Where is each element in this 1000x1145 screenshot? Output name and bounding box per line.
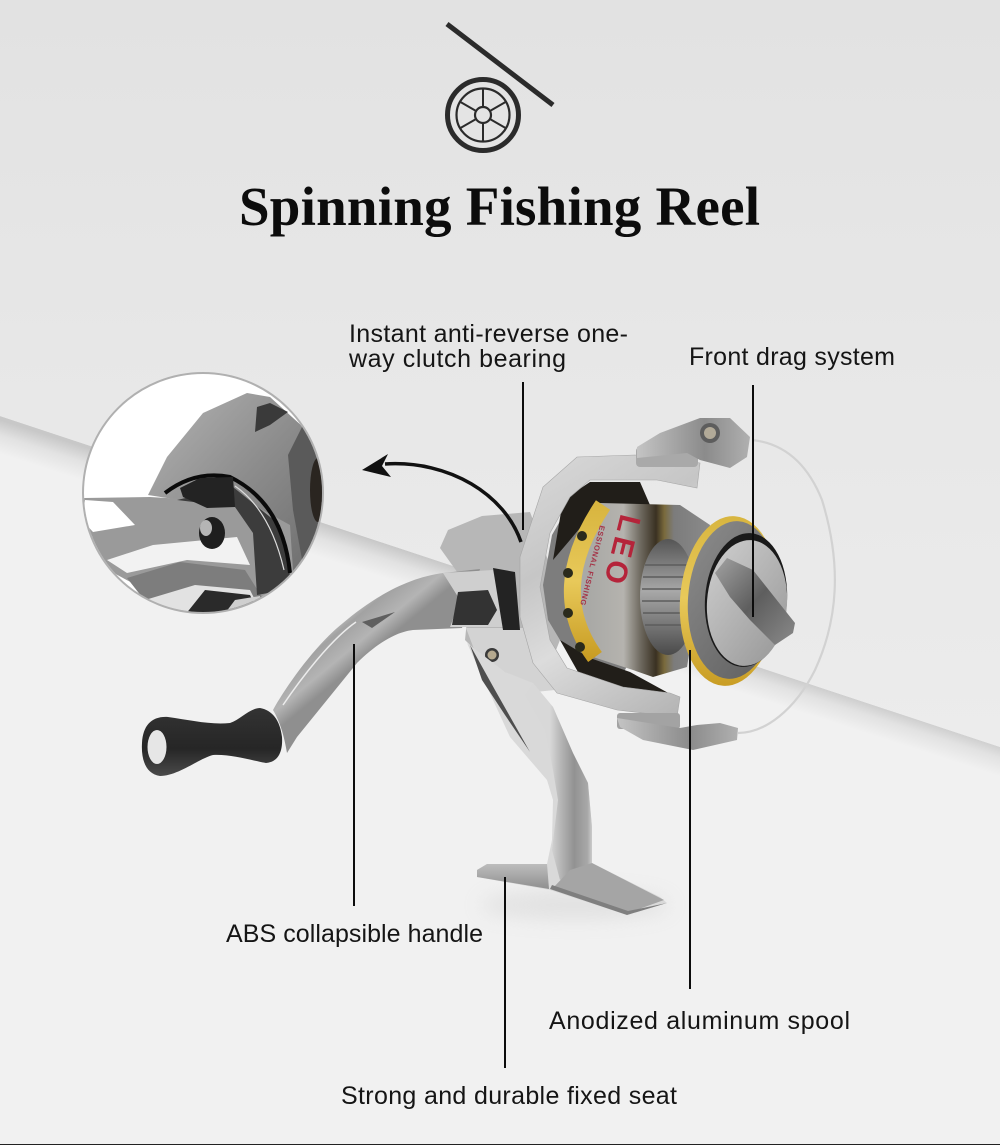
bail wire: [738, 440, 835, 733]
spool drum: [563, 503, 710, 677]
spool threaded shaft: [640, 539, 698, 655]
spool brand text: LEO: [597, 511, 646, 587]
callout lines: [354, 382, 753, 1068]
bail frame arm: [520, 455, 700, 717]
drag knob: [715, 558, 795, 645]
reel floor shadow: [480, 891, 670, 919]
label: anodized aluminum spool: Anodized aluminum spool: [549, 1007, 850, 1035]
label: fixed seat: Strong and durable fixed seat: [341, 1082, 677, 1110]
label: instant anti-reverse bearing: Instant anti-reverse one-: [349, 320, 628, 348]
reel stand and foot: [467, 643, 667, 915]
handle arm: [273, 568, 520, 753]
screw on body: [485, 648, 499, 662]
reel body housing: [440, 512, 560, 700]
lower bail arm: [617, 713, 738, 750]
icon: reel wheel and line: [447, 24, 553, 150]
frame dark interior: [553, 482, 672, 695]
arrow: from bearing to inset: [362, 454, 521, 542]
spool small text: ESSIONAL FISHING: [578, 525, 607, 606]
spool back chrome: [543, 495, 640, 680]
upper bail arm: [636, 418, 750, 468]
lower body plate: [466, 628, 555, 692]
label: ABS collapsible handle: ABS collapsible handle: [226, 920, 483, 948]
handle knob: [142, 708, 282, 776]
anodized gold rim: [674, 513, 792, 689]
title: Spinning Fishing Reel: [239, 176, 760, 237]
reel: [142, 418, 835, 915]
inset: magnified bearing detail: [80, 373, 326, 625]
label: front drag system: Front drag system: [689, 343, 895, 371]
label: instant anti-reverse bearing: way clutch bearing: [348, 345, 566, 373]
